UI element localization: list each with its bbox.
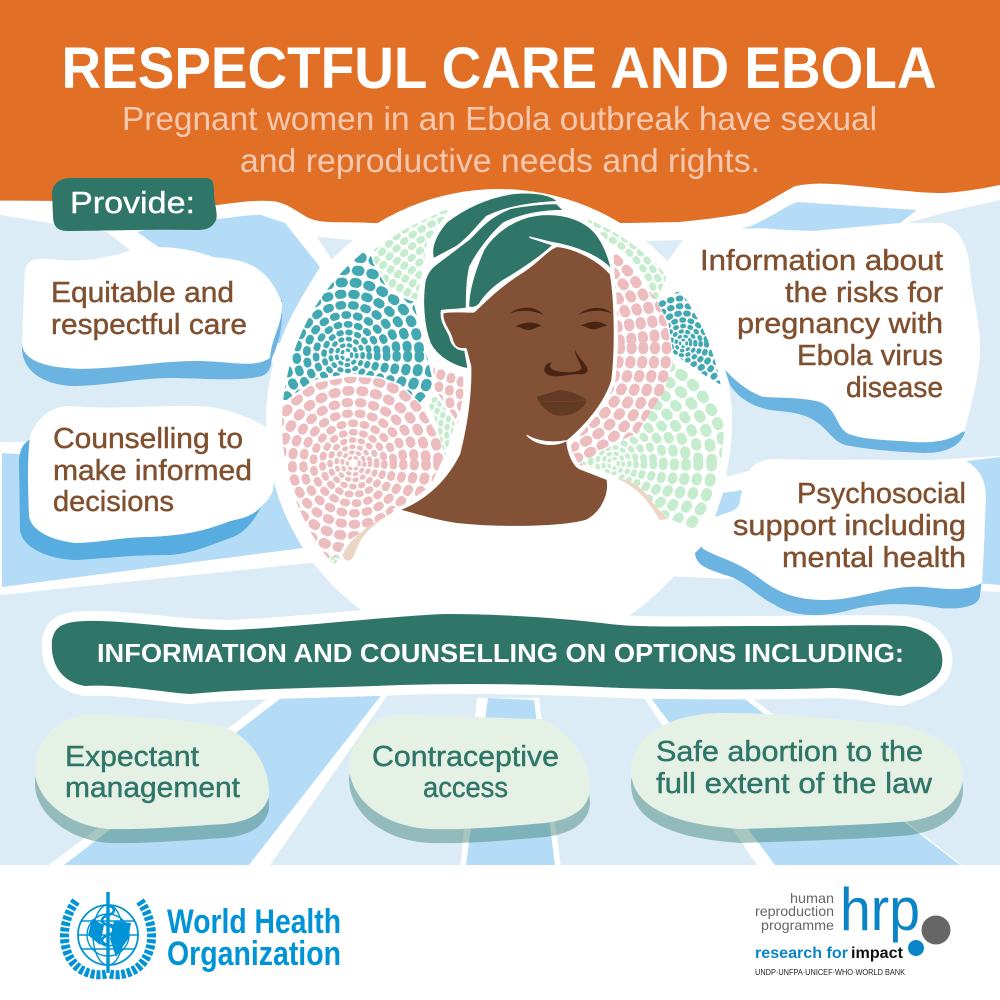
banner: information and counselling: INFORMATION AND COUNSELLING ON OPTIONS INCLUDING: — [97, 638, 904, 668]
option: safe abortion — [631, 713, 963, 843]
orange header band — [0, 0, 1000, 230]
card: information about risks: pregnancy with — [737, 308, 943, 340]
card: psychosocial support: mental health — [782, 542, 966, 574]
head, neck and shoulders — [395, 245, 616, 528]
white dress — [334, 512, 676, 616]
subtitle: and reproductive needs and rights. — [240, 142, 760, 179]
card: equitable and respectful care: respectful care — [51, 309, 247, 341]
footer band — [0, 865, 1000, 1000]
card: information about risks: disease — [846, 372, 943, 404]
white circle behind portrait — [266, 189, 732, 655]
map background: light blocks — [0, 200, 1000, 865]
jaw highlight — [527, 435, 567, 444]
HRP logo — [755, 876, 950, 977]
HRP logo: human — [790, 890, 834, 906]
card: counselling to make informed decisions: Counselling to — [53, 423, 243, 455]
option: expectant management: management — [65, 772, 240, 804]
option: safe abortion: full extent of the law — [656, 768, 933, 800]
option: contraceptive access: Contraceptive — [372, 741, 559, 773]
HRP logo: impact — [851, 945, 903, 962]
HRP logo: programme — [761, 917, 834, 933]
card: information about risks: Information about — [700, 245, 943, 277]
card: psychosocial support: Psychosocial — [797, 478, 966, 510]
lips — [537, 390, 586, 416]
option: expectant management — [35, 715, 269, 843]
HRP logo: UNDP·UNFPA·UNICEF·WHO·WORLD BANK — [755, 968, 906, 977]
option: expectant management: Expectant — [65, 741, 199, 773]
subtitle — [122, 100, 877, 179]
card: psychosocial support — [695, 459, 986, 615]
option: contraceptive access: access — [423, 772, 508, 804]
heading tag: Provide — [52, 178, 217, 231]
option: contraceptive access — [349, 715, 590, 843]
HRP logo: reproduction — [755, 903, 834, 919]
card: information about risks — [700, 223, 980, 453]
option: safe abortion: Safe abortion to the — [656, 736, 923, 768]
map background: blue blocks — [2, 202, 1000, 865]
card: equitable and respectful care — [22, 247, 282, 386]
card: equitable and respectful care: Equitable and — [51, 277, 234, 309]
map background: roads — [45, 693, 965, 868]
WHO wordmark — [167, 903, 341, 973]
veil pattern — [235, 197, 737, 575]
HRP logo: hrp — [840, 876, 920, 943]
turban — [423, 193, 612, 369]
HRP logo: research for — [755, 945, 848, 962]
card: counselling to make informed decisions — [19, 406, 274, 560]
title: RESPECTFUL CARE AND EBOLA — [62, 36, 936, 101]
card: counselling to make informed decisions: decisions — [53, 486, 174, 518]
WHO emblem — [64, 892, 152, 975]
WHO wordmark: Organization — [167, 935, 341, 973]
eyebrows and eyes — [510, 308, 612, 330]
subtitle: Pregnant women in an Ebola outbreak have sexual — [122, 100, 877, 137]
nose — [544, 350, 588, 376]
shoulder straps — [343, 478, 668, 561]
card: psychosocial support: support including — [733, 510, 966, 542]
card: information about risks: Ebola virus — [797, 340, 943, 372]
card: information about risks: the risks for — [785, 277, 943, 309]
heading tag: Provide: Provide: — [70, 185, 195, 220]
WHO wordmark: World Health — [167, 903, 341, 941]
portrait of woman with patterned veil — [235, 193, 737, 647]
banner: information and counselling — [52, 614, 942, 696]
card: counselling to make informed decisions: make informed — [53, 455, 252, 487]
